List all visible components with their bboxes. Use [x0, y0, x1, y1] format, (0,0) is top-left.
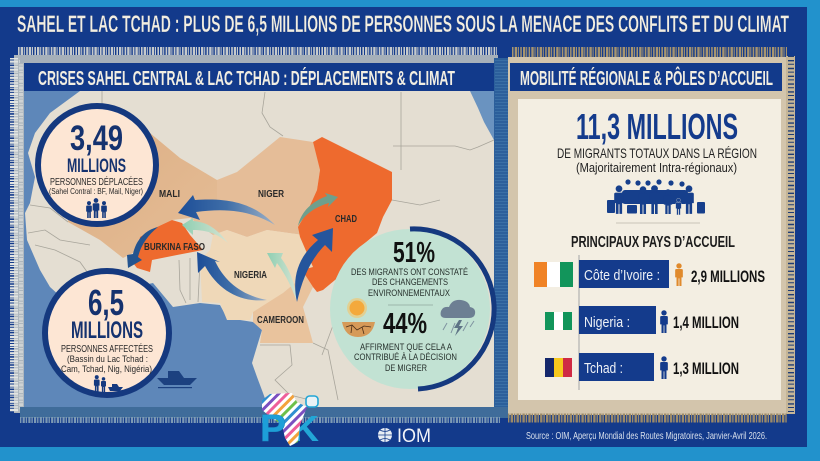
logo: IOM: IOM — [397, 426, 431, 447]
panel: mobility — [508, 52, 795, 418]
callout: climate stats: DES MIGRANTS ONT CONSTATÉ — [351, 267, 468, 278]
callout: 6,5 millions: MILLIONS — [71, 317, 143, 344]
arrow: Cameroon to Burkina — [197, 252, 267, 300]
callout: 3,49 millions: (Sahel Contral : BF, Mail, Niger) — [49, 187, 143, 196]
callout: 6,5 millions — [45, 271, 169, 395]
row: Côte d'Ivoire: Côte d’Ivoire : — [584, 267, 660, 284]
arrow: Niger to Mali — [178, 195, 275, 225]
country: Niger — [190, 137, 320, 237]
callout: 6,5 millions: (Bassin du Lac Tchad : — [67, 354, 148, 365]
row: Nigeria — [545, 306, 739, 334]
icon: crowd with luggage — [607, 179, 705, 215]
icon: people and boat — [94, 375, 123, 392]
arrow: Mali to coast — [127, 227, 158, 268]
row: Côte d'Ivoire — [534, 260, 765, 288]
headline stat: 11,3 MILLIONS — [576, 106, 738, 147]
country: Cameroon — [253, 270, 313, 343]
callout: climate stats: AFFIRMENT QUE CELA A — [360, 342, 453, 353]
arrow: Nigeria to Burkina — [182, 218, 228, 243]
callout: 6,5 millions: PERSONNES AFFECTÉES — [61, 342, 153, 355]
callout: 3,49 millions — [38, 106, 156, 224]
arrow: Cameroon to Chad — [295, 228, 333, 302]
country labels — [144, 189, 357, 326]
callout: climate stats — [330, 229, 494, 389]
heading: main host countries: PRINCIPAUX PAYS D’ACCUEIL — [571, 234, 735, 251]
callout: 6,5 millions: 6,5 — [88, 282, 124, 323]
flag: Nigeria — [545, 312, 572, 330]
country labels: CHAD — [335, 214, 357, 225]
panel header: crises: CRISES SAHEL CENTRAL & LAC TCHAD : DÉPLACEMENTS & CLIMAT — [38, 67, 455, 90]
headline stat — [557, 106, 757, 175]
arrow: Cameroon to Nigeria — [267, 253, 297, 302]
callout: 6,5 millions: Cam, Tchad, Nig, Nigéria) — [61, 364, 152, 375]
row: Nigeria: Nigeria : — [584, 314, 630, 331]
country labels: NIGERIA — [234, 270, 267, 281]
country labels: MALI — [159, 189, 180, 200]
red sea — [470, 91, 494, 140]
paper — [518, 99, 781, 400]
logo: IOM — [378, 426, 431, 447]
map base — [24, 91, 494, 407]
frayed edge of map panel — [14, 51, 510, 420]
flag: Côte d'Ivoire — [534, 262, 573, 287]
callout: 3,49 millions: MILLIONS — [67, 156, 126, 177]
logo: PK — [260, 393, 319, 450]
row: Côte d'Ivoire: 2,9 MILLIONS — [691, 267, 765, 286]
icon: people — [86, 198, 107, 218]
arrow: within Chad — [298, 193, 338, 226]
country: Nigeria — [200, 230, 313, 320]
logo: PK: K — [292, 408, 319, 449]
country: Chad — [298, 137, 392, 292]
row: Tchad: Tchad : — [584, 360, 623, 377]
divider — [616, 222, 700, 224]
callout: 3,49 millions: 3,49 — [70, 119, 123, 158]
callout: climate stats: 44% — [383, 308, 427, 340]
row: Nigeria: 1,4 MILLION — [673, 313, 739, 332]
icon: boat — [157, 371, 197, 388]
country labels: CAMEROON — [257, 315, 304, 326]
logo: PK: P — [260, 408, 286, 450]
callout: climate stats: ENVIRONNEMENTAUX — [368, 288, 451, 299]
icon: storm cloud — [441, 300, 475, 336]
ocean — [24, 91, 268, 407]
panel: crises map — [14, 51, 510, 420]
country labels: NIGER — [258, 189, 285, 200]
callout: climate stats: 51% — [393, 237, 435, 269]
country labels: BURKINA FASO — [144, 242, 205, 253]
callout: 3,49 millions: PERSONNES DÉPLACÉES — [50, 175, 143, 188]
icon: sun and dry soil — [342, 298, 375, 337]
callout: climate stats: DE MIGRER — [385, 363, 427, 374]
burlap frame — [508, 52, 795, 418]
headline stat: (Majoritairement Intra-régionaux) — [576, 160, 737, 175]
callout: climate stats: DES CHANGEMENTS — [372, 277, 448, 288]
panel header: mobility — [510, 63, 782, 91]
row: Tchad: 1,3 MILLION — [673, 359, 739, 378]
callout: climate stats: CONTRIBUÉ À LA DÉCISION — [354, 352, 457, 363]
borders — [28, 91, 494, 400]
country: Mali — [68, 120, 217, 258]
panel header: crises — [24, 63, 494, 91]
row: Tchad — [545, 353, 739, 381]
flag: Tchad — [545, 358, 572, 377]
country: Burkina Faso — [133, 220, 203, 272]
